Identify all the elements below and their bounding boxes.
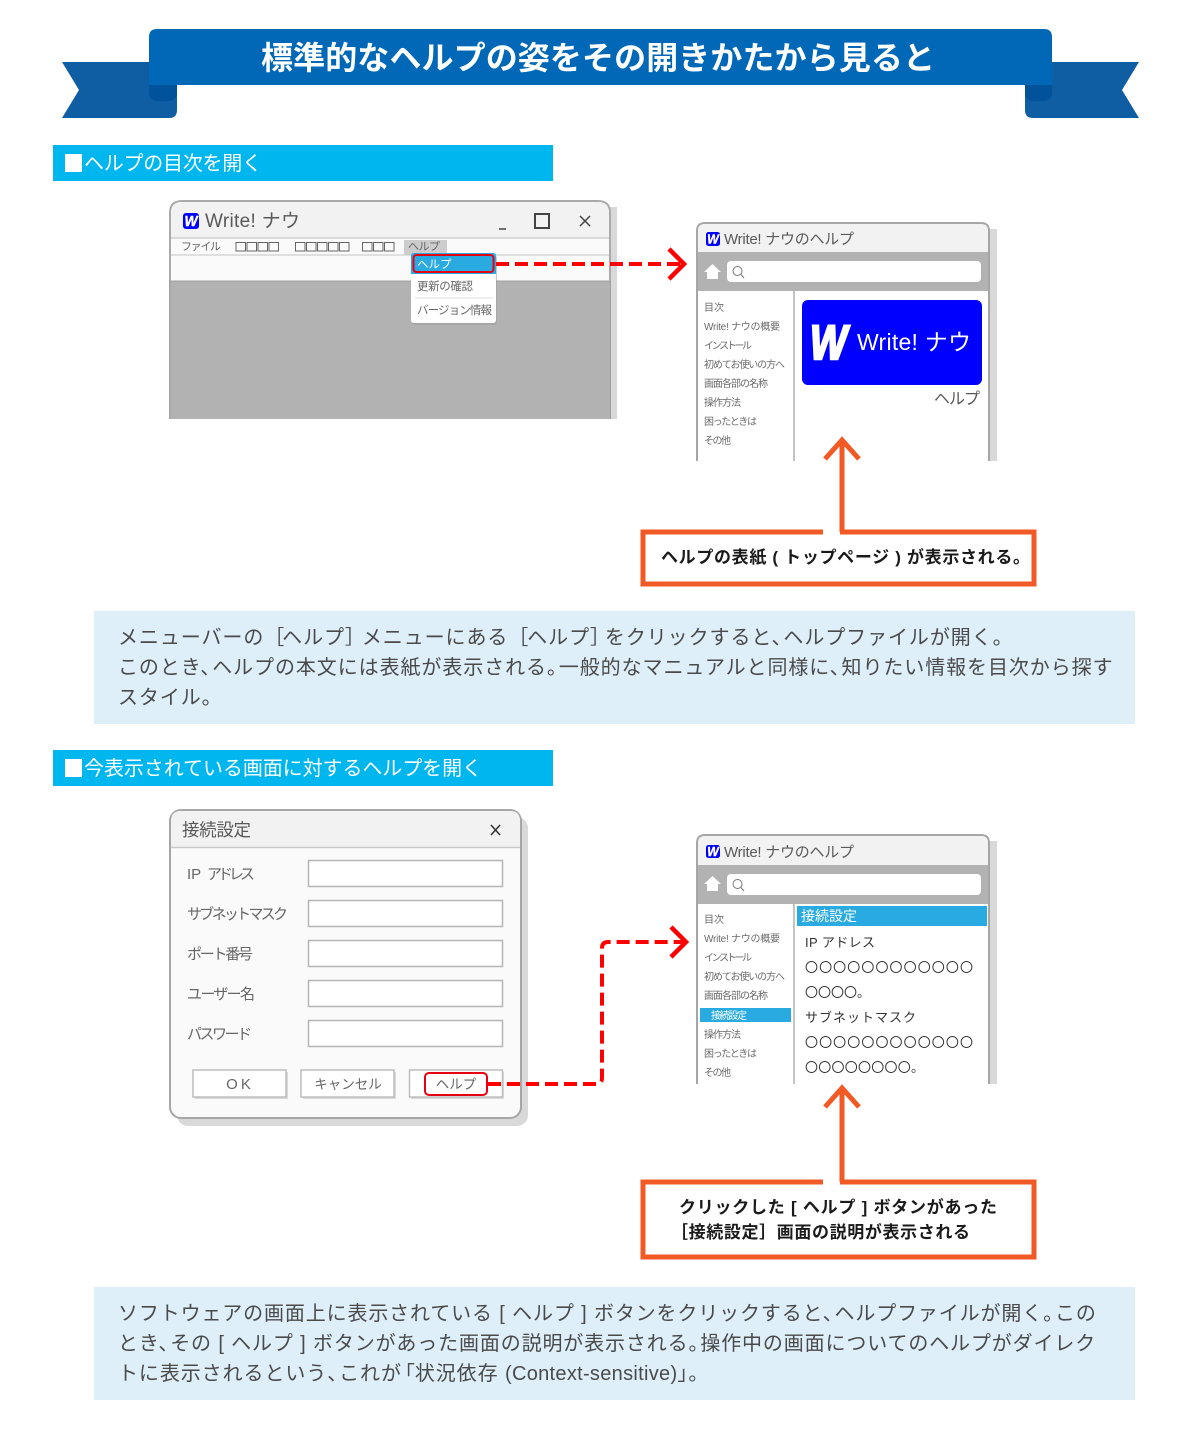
window title: Write! ナウ [205,211,300,232]
form fields: ポート番号 [187,946,253,963]
ribbon left fold [149,80,177,101]
application window with help menu [170,201,617,419]
arrow: callout to cover page [825,440,859,532]
help window: cover page [697,223,997,461]
explanation panel 2: とき、その [ ヘルプ ] ボタンがあった画面の説明が表示される。操作中の画面についてのヘルプがダイレク [118,1332,1096,1355]
section heading 1 [53,145,553,181]
ribbon main band [149,29,1052,85]
icon: app logo: W [707,232,720,246]
contents sidebar [704,301,785,447]
section header: connection settings: 接続設定 [801,908,857,924]
explanation panel 1: このとき、ヘルプの本文には表紙が表示される。一般的なマニュアルと同様に、知りたい情報を目次から探す [118,656,1114,679]
contents sidebar: 困ったときは [704,1048,757,1060]
contents sidebar: 初めてお使いの方へ [704,970,785,983]
title ribbon [62,29,1139,118]
help toolbar [698,865,988,904]
form fields [187,860,502,1046]
help body text: 〇〇〇〇〇〇〇〇〇〇〇〇 [805,960,973,975]
contents sidebar: 目次 [704,301,724,314]
explanation panel 2: トに表示されるという、これが「状況依存 (Context-sensitive)」。 [118,1362,709,1385]
blue product cover: W [810,317,850,370]
form fields: パスワード [187,1026,252,1043]
contents sidebar: 画面各部の名称 [704,989,768,1002]
help body text: 〇〇〇〇〇〇〇〇。 [805,1060,924,1075]
dialog buttons: キャンセル [314,1077,382,1092]
ribbon right tail [1025,62,1139,118]
contents sidebar [700,913,791,1079]
contents sidebar: その他 [704,1066,731,1079]
help dropdown menu: 更新の確認 [417,279,474,293]
blue product cover: Write! ナウ [857,329,971,355]
explanation panel 2: ソフトウェアの画面上に表示されている [ ヘルプ ] ボタンをクリックすると、ヘルプファイルが開く。この [118,1302,1097,1325]
form fields: IP [187,866,201,883]
callout: context page: クリックした [ ヘルプ ] ボタンがあった [679,1197,997,1217]
menu bar [181,240,447,255]
contents sidebar: 目次 [704,913,724,926]
contents sidebar: Write! ナウの概要 [704,932,780,945]
ribbon left tail [62,62,177,118]
section heading 2: 今表示されている画面に対するヘルプを開く [84,757,482,780]
help window title: Write! ナウのヘルプ [724,231,854,248]
help window: context page [697,835,997,1084]
form fields: サブネットマスク [187,905,288,923]
connection settings dialog [170,810,528,1126]
explanation panel 1: スタイル。 [118,686,223,709]
explanation panel 1 [94,611,1135,724]
help label: ヘルプ [934,390,980,408]
help body text [805,935,973,1075]
help dropdown menu: バージョン情報 [417,304,492,317]
help body text: 〇〇〇〇。 [805,985,870,1000]
contents sidebar: インストール [704,341,752,352]
callout: cover page: ヘルプの表紙 ( トップページ ) が表示される。 [661,547,1030,567]
help dropdown menu [411,253,497,325]
contents sidebar: 困ったときは [704,416,757,428]
contents sidebar: 接続設定 [711,1009,747,1022]
section heading 2 [53,750,553,786]
ribbon right fold [1025,80,1052,101]
help body text: サブネットマスク [805,1010,916,1025]
arrow: callout to context page [825,1088,859,1182]
dialog title: 接続設定 [182,820,251,840]
icon: app logo: W [184,213,199,230]
window controls [499,214,590,229]
contents sidebar: 操作方法 [704,1028,741,1041]
contents sidebar: その他 [704,434,731,447]
help dropdown menu: ヘルプ [417,258,452,271]
help body text: IP アドレス [805,935,875,950]
section header: connection settings [797,906,987,926]
callout: context page: ［接続設定］画面の説明が表示される [671,1222,970,1242]
contents sidebar: インストール [704,953,752,964]
menu bar: ファイル [181,241,221,253]
icon: close [491,825,500,835]
contents sidebar: 操作方法 [704,396,741,409]
explanation panel 1: メニューバーの［ヘルプ］メニューにある［ヘルプ］をクリックすると、ヘルプファイルが開く。 [118,626,1014,649]
icon: app logo: W [707,845,720,859]
explanation panel 2 [94,1287,1135,1400]
form fields: アドレス [207,866,255,883]
section heading 1: ヘルプの目次を開く [84,152,262,175]
arrow: menu to help window [496,249,684,279]
callout: context page [643,1182,1034,1257]
help body text: 〇〇〇〇〇〇〇〇〇〇〇〇 [805,1035,973,1050]
help window title: Write! ナウのヘルプ [724,844,854,861]
arrow: help button to help window [488,927,686,1084]
contents sidebar: Write! ナウの概要 [704,320,780,333]
menu bar: ヘルプ [408,240,440,253]
callout: cover page [643,532,1034,584]
contents sidebar: 画面各部の名称 [704,377,768,390]
form fields: ユーザー名 [187,986,255,1003]
dialog buttons [193,1070,504,1099]
dialog buttons: ヘルプ [436,1077,477,1092]
blue product cover [802,300,982,385]
contents sidebar: 初めてお使いの方へ [704,358,785,371]
title: 標準的なヘルプの姿をその開きかたから見ると [261,40,935,76]
dialog buttons: OK [226,1076,254,1093]
help toolbar [698,252,988,291]
